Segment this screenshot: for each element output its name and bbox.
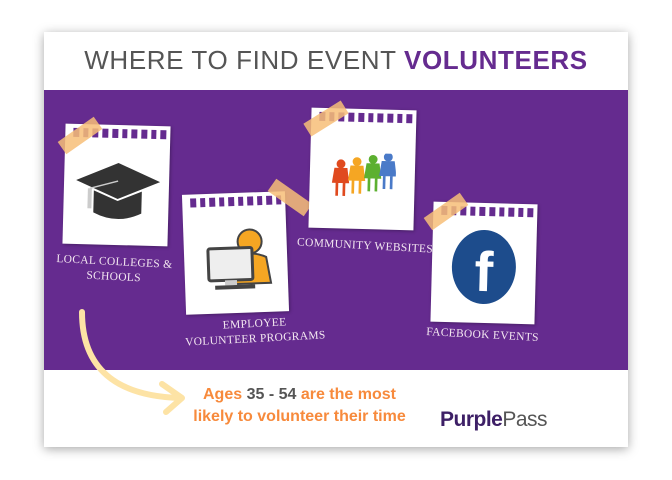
purple band: [44, 90, 628, 370]
icon: computer person: [206, 228, 272, 290]
tape 1: [58, 117, 102, 154]
tape 2: [268, 179, 312, 216]
logo: PurplePass: [440, 408, 547, 431]
card background: [44, 32, 628, 447]
note: community: [308, 108, 417, 230]
note: employee: [182, 191, 289, 315]
label: employee: VOLUNTEER PROGRAMS: [185, 329, 326, 349]
label: community: COMMUNITY WEBSITES: [297, 236, 433, 256]
arrow: [79, 309, 185, 415]
label: colleges: SCHOOLS: [86, 270, 141, 284]
label: facebook: FACEBOOK EVENTS: [426, 326, 539, 344]
label: colleges: [56, 253, 173, 284]
callout text: Ages 35 - 54 are the most likely to volunteer their time: [193, 386, 406, 425]
label: employee: EMPLOYEE: [222, 316, 287, 332]
icon: facebook: f: [474, 240, 494, 303]
tape 3: [303, 100, 349, 137]
note: facebook: [430, 202, 538, 324]
icon: graduation cap: [76, 163, 160, 219]
tape 4: [424, 193, 468, 230]
note: colleges: [62, 124, 171, 246]
icon: facebook: [452, 230, 516, 304]
title: WHERE TO FIND EVENT VOLUNTEERS: [84, 45, 588, 75]
label: employee: [185, 316, 326, 349]
icon: people: [332, 154, 396, 196]
label: colleges: LOCAL COLLEGES &: [56, 253, 173, 271]
